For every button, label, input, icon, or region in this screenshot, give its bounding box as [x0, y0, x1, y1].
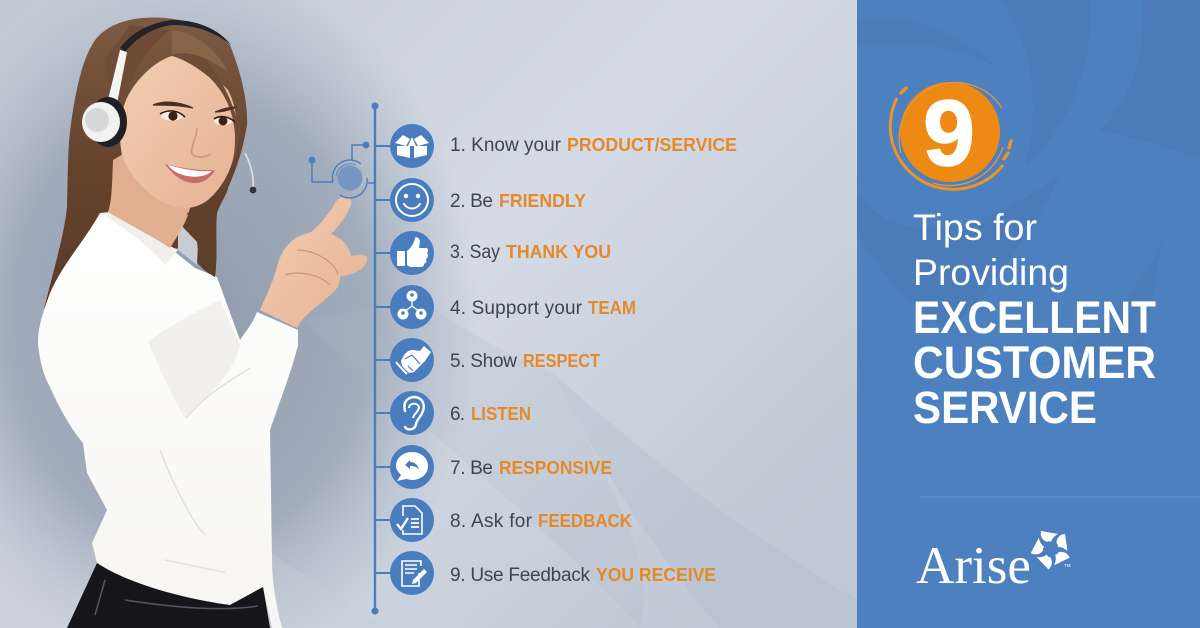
heading: excellent customer service: SERVICE	[913, 382, 1097, 433]
tip 5	[450, 350, 601, 372]
tip 7	[450, 457, 612, 479]
tip 3: 3. Say	[450, 242, 500, 263]
icon: team	[390, 285, 434, 329]
tip 4: 4. Support your	[450, 298, 583, 319]
icon: box	[390, 124, 434, 168]
tip 1	[450, 134, 737, 156]
heading: tips for providing	[913, 207, 1069, 293]
icon: checklist form	[390, 498, 434, 542]
nose	[192, 128, 211, 157]
headset stem	[107, 50, 127, 104]
panel: grey-blue background	[0, 0, 857, 628]
tip 9: YOU RECEIVE	[596, 564, 716, 585]
smile	[165, 164, 215, 183]
tip 9	[450, 564, 716, 586]
brows, eyes	[153, 102, 237, 112]
icon: speech bubble with reply arrow	[390, 445, 434, 489]
belt and trousers	[67, 563, 270, 628]
photo: woman with headset pointing	[38, 17, 367, 628]
icon: thumbs up	[390, 231, 434, 275]
tip 2: FRIENDLY	[499, 190, 587, 211]
tip 1: 1. Know your	[450, 135, 562, 156]
heading: excellent customer service: CUSTOMER	[913, 337, 1156, 388]
hair front	[105, 25, 240, 165]
icon: handshake	[390, 338, 434, 382]
timeline axis	[372, 102, 395, 614]
hair strand right of neck	[187, 186, 228, 277]
tip 6: LISTEN	[471, 403, 531, 424]
tip 2: 2. Be	[450, 191, 493, 212]
heading: tips for providing: Tips for	[913, 207, 1037, 248]
heading: excellent customer service	[913, 292, 1156, 433]
logo: Arise: Arise	[916, 537, 1031, 595]
icon: smiley	[390, 178, 434, 222]
tip 7: RESPONSIVE	[499, 457, 612, 478]
tip 3	[450, 241, 611, 263]
tip 5: 5. Show	[450, 351, 517, 372]
tip 7: 7. Be	[450, 458, 493, 479]
microphone	[245, 153, 253, 187]
logo: Arise: TM	[1064, 563, 1071, 568]
panel: blue sidebar	[857, 0, 1200, 628]
icon: note with pencil	[390, 551, 434, 595]
badge: number 9: 9	[923, 81, 975, 185]
earcup	[89, 97, 127, 147]
shirt	[38, 213, 298, 628]
tip 1: PRODUCT/SERVICE	[567, 134, 737, 155]
tip 2	[450, 190, 587, 212]
neck	[108, 150, 195, 248]
tip 6	[450, 403, 531, 425]
tip 9: 9. Use Feedback	[450, 565, 590, 586]
badge: number 9	[890, 81, 1011, 189]
tip 8: FEEDBACK	[538, 510, 633, 531]
tip 4: TEAM	[588, 297, 636, 318]
heading: tips for providing: Providing	[913, 252, 1069, 293]
collar placket	[178, 222, 198, 265]
touch target circuit	[309, 142, 375, 198]
face	[120, 55, 237, 208]
tip 3: THANK YOU	[506, 241, 611, 262]
hair back	[44, 17, 247, 309]
icon: ear	[390, 391, 434, 435]
tip 5: RESPECT	[523, 350, 601, 371]
tip 4	[450, 297, 636, 319]
tip 8	[450, 510, 633, 532]
heading: excellent customer service: EXCELLENT	[913, 292, 1156, 343]
logo: Arise	[916, 531, 1071, 595]
pointing hand	[260, 197, 367, 328]
headset band	[120, 20, 231, 52]
tip 6: 6.	[450, 404, 465, 425]
tip 8: 8. Ask for	[450, 511, 533, 532]
shirt shading	[148, 300, 240, 418]
